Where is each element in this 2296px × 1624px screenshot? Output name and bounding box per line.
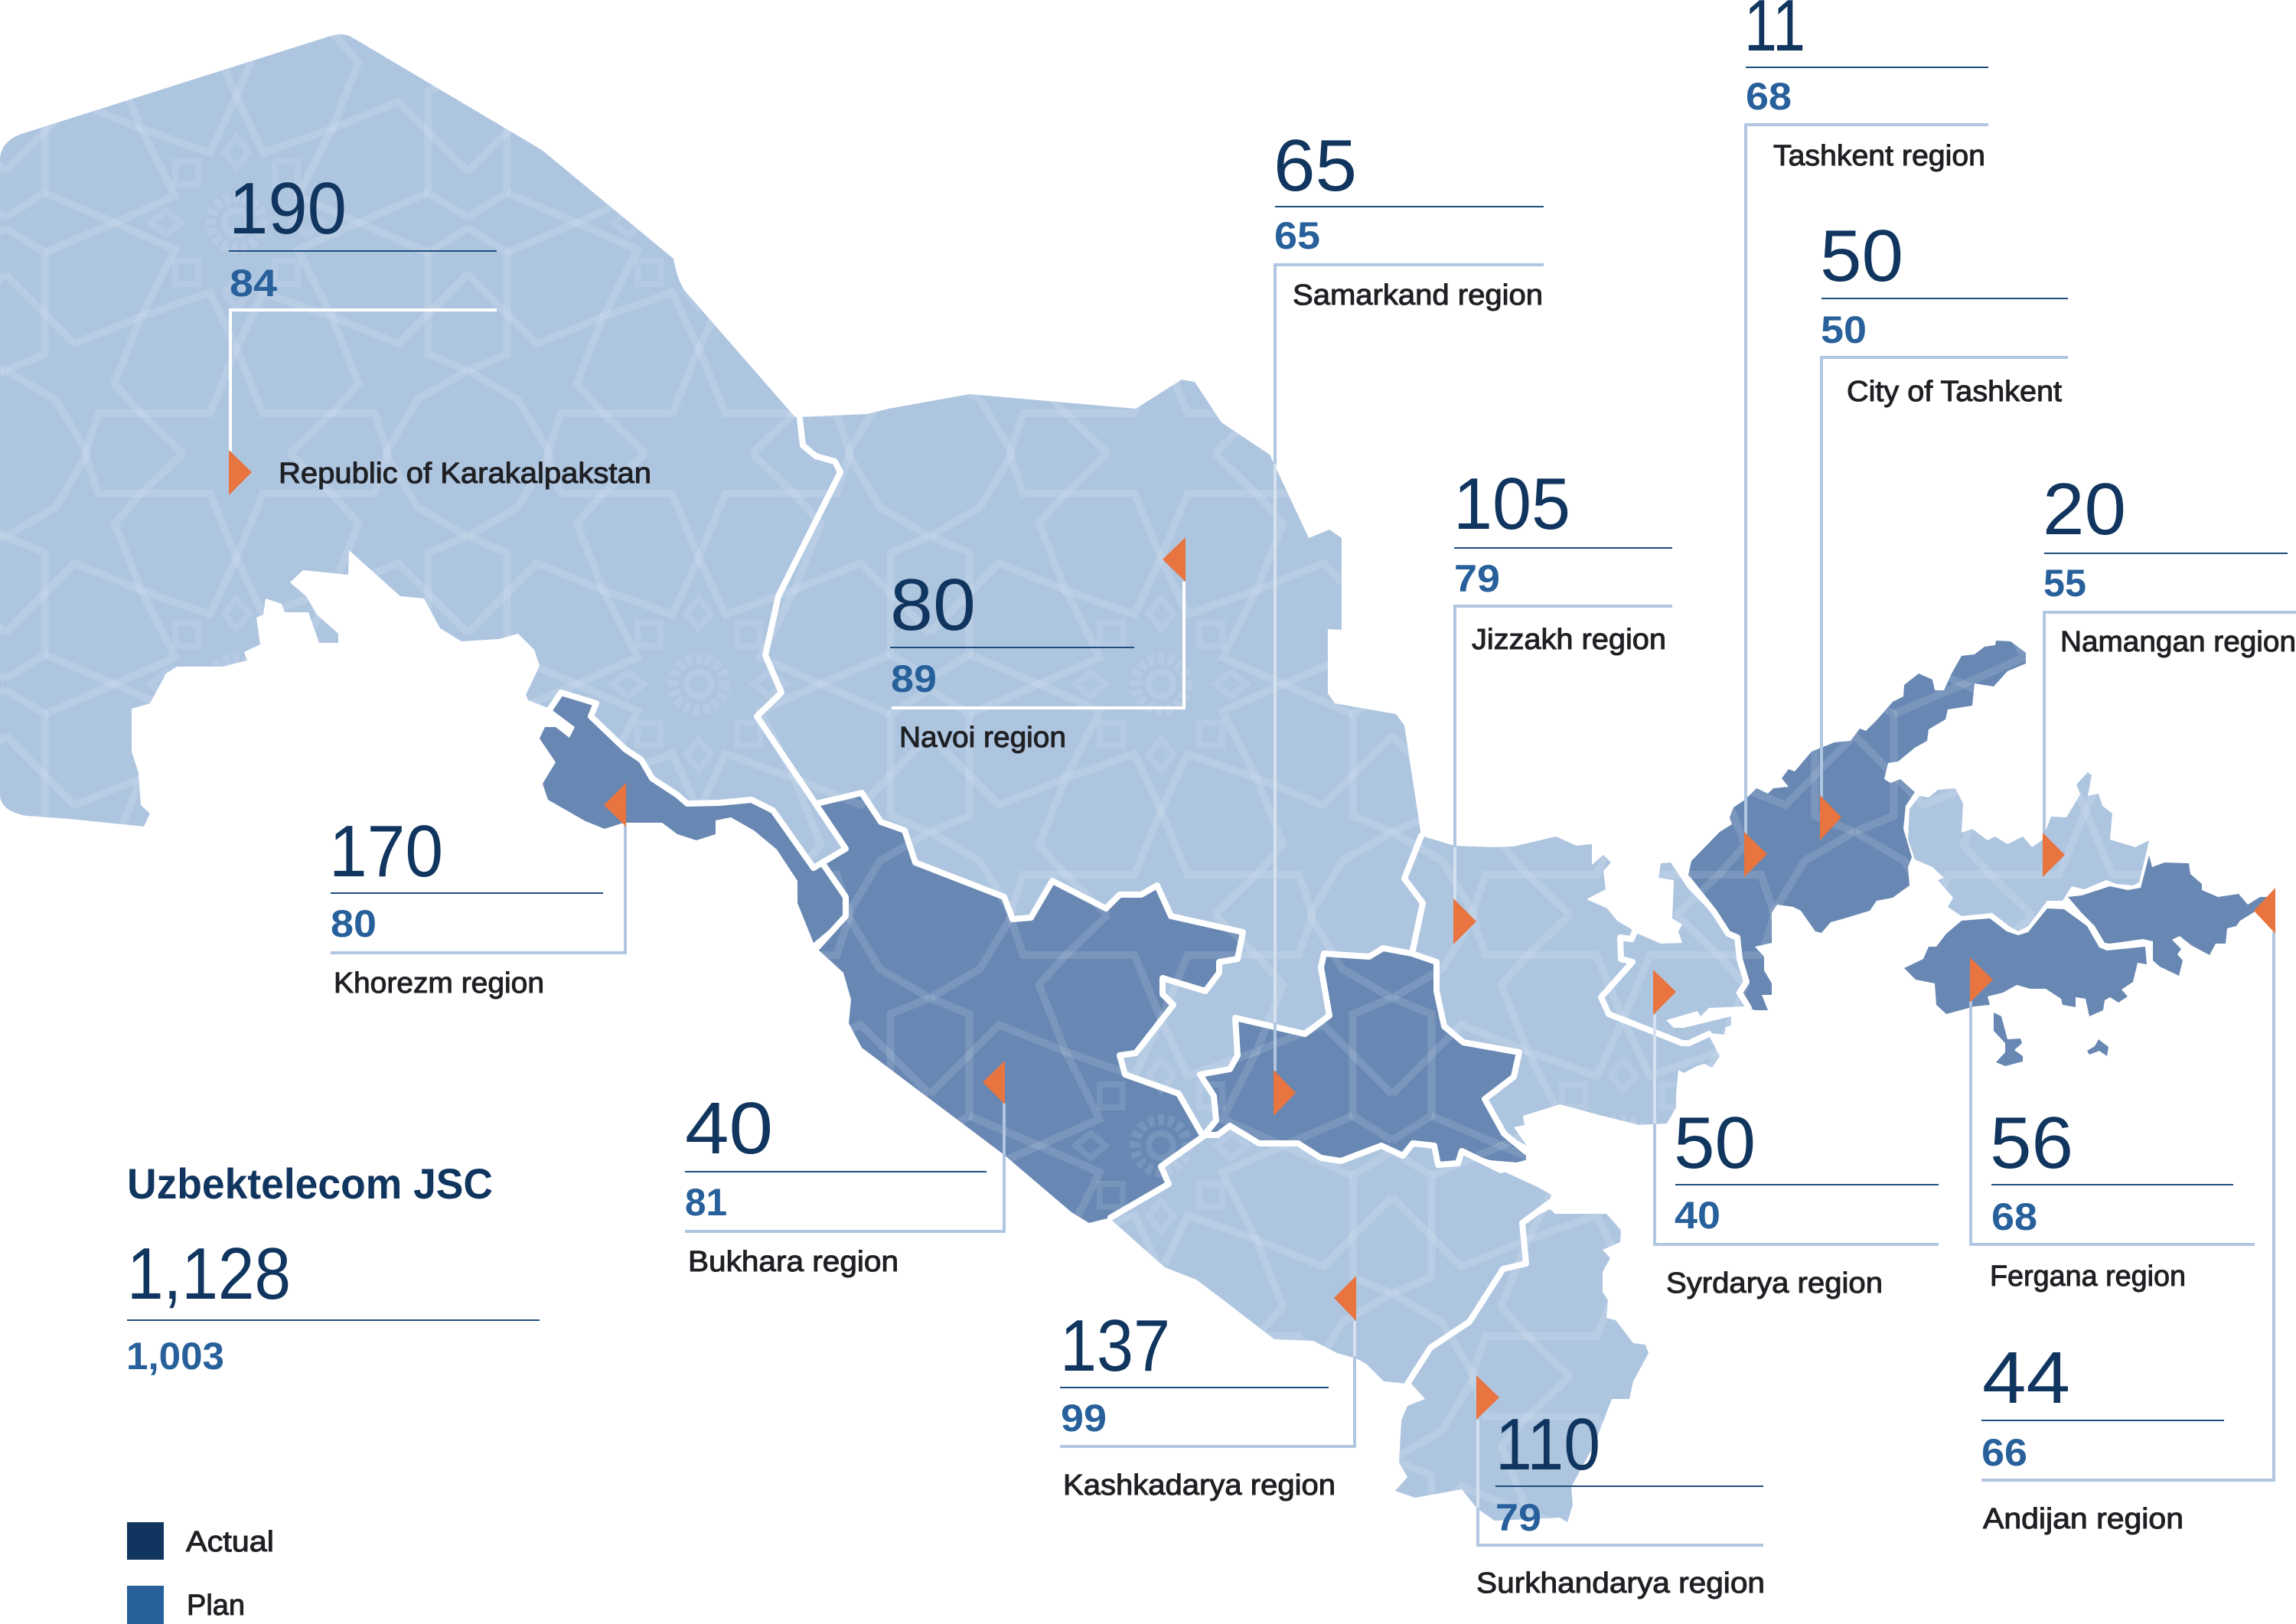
callout: Surkhandarya region: 110 <box>1495 1404 1600 1485</box>
region: Jizzakh <box>1404 836 1720 1146</box>
callout: Kashkadarya region: 137 <box>1060 1305 1170 1387</box>
callout: Jizzakh region: 79 <box>1454 557 1500 600</box>
callout: Khorezm region: 170 <box>329 810 443 892</box>
legend swatch: actual <box>127 1522 164 1560</box>
region: Tashkent <box>1688 641 2026 1010</box>
callout: Andijan region: 66 <box>1981 1431 2027 1474</box>
callout: Surkhandarya region: Surkhandarya region <box>1476 1567 1765 1600</box>
region: Bukhara <box>817 793 1243 1223</box>
region: Surkhandarya <box>1395 1209 1649 1522</box>
region: Andijan <box>2068 856 2268 976</box>
region: Syrdarya <box>1601 863 1745 1042</box>
callout: Samarkand region: 65 <box>1274 125 1357 207</box>
callout: Tashkent region: Tashkent region <box>1773 140 1985 172</box>
region: Khorezm <box>540 693 846 943</box>
callout: Khorezm region: Khorezm region <box>334 967 544 1000</box>
callout: Kashkadarya region: 99 <box>1061 1397 1107 1440</box>
callout: Bukhara region: 81 <box>685 1181 727 1224</box>
callout: Fergana region: 56 <box>1990 1102 2073 1184</box>
region: Samarkand <box>1200 948 1526 1165</box>
callout: Republic of Karakalpakstan: 84 <box>230 262 277 305</box>
total plan: 1,003 <box>126 1335 224 1378</box>
callout: Navoi region: Navoi region <box>899 722 1066 754</box>
region: Karakalpakstan <box>0 34 846 868</box>
title: Uzbektelecom JSC <box>127 1159 493 1208</box>
callout: Namangan region: Namangan region <box>2060 626 2296 658</box>
callout: City of Tashkent <box>1820 215 2068 840</box>
callout: Jizzakh region: Jizzakh region <box>1472 624 1666 656</box>
callout: Republic of Karakalpakstan <box>229 168 651 495</box>
legend <box>127 1522 274 1624</box>
callout: Fergana region: Fergana region <box>1990 1260 2186 1293</box>
callout: City of Tashkent: City of Tashkent <box>1847 376 2062 408</box>
region: Fergana <box>1904 908 2147 1066</box>
callout: Kashkadarya region <box>1060 1276 1356 1502</box>
legend swatch: plan <box>127 1586 164 1624</box>
callout: Khorezm region: 80 <box>331 902 377 945</box>
callout: Jizzakh region <box>1453 463 1672 944</box>
callout: Andijan region <box>1981 888 2275 1535</box>
region: Namangan <box>1908 772 2149 931</box>
callout: Fergana region: 68 <box>1991 1195 2037 1238</box>
total: Uzbektelecom JSC <box>126 1159 540 1378</box>
callout: Khorezm region <box>329 783 626 1000</box>
callout: Andijan region: Andijan region <box>1983 1503 2183 1535</box>
callout: Syrdarya region: 40 <box>1675 1194 1720 1237</box>
callout: City of Tashkent: 50 <box>1820 215 1903 297</box>
callout: Bukhara region: 40 <box>685 1088 773 1169</box>
region: Navoi <box>757 380 1423 1136</box>
callout: Andijan region: 44 <box>1982 1337 2070 1419</box>
callout: Bukhara region: Bukhara region <box>688 1246 899 1278</box>
legend label: actual: Actual <box>186 1526 274 1558</box>
callout: Namangan region: 55 <box>2043 562 2086 605</box>
total actual: 1,128 <box>127 1233 291 1315</box>
callout: Fergana region <box>1970 957 2255 1293</box>
callout: Republic of Karakalpakstan: Republic of Karakalpakstan <box>279 458 651 490</box>
callout: Bukhara region <box>685 1061 1005 1278</box>
callout: Syrdarya region <box>1653 970 1939 1300</box>
callout: Navoi region <box>890 537 1186 754</box>
callout: Samarkand region: Samarkand region <box>1293 279 1543 311</box>
callout: Kashkadarya region: Kashkadarya region <box>1063 1469 1336 1502</box>
callout: Syrdarya region: 50 <box>1674 1102 1756 1184</box>
callout: Namangan region: 20 <box>2043 468 2126 550</box>
region: Kashkadarya <box>1110 1126 1551 1384</box>
callout: Navoi region: 89 <box>891 657 937 700</box>
callout: Surkhandarya region <box>1476 1375 1765 1600</box>
callout: Tashkent region <box>1744 0 1988 877</box>
callout: Republic of Karakalpakstan: 190 <box>229 168 347 249</box>
callout: Jizzakh region: 105 <box>1453 463 1570 545</box>
callout: Tashkent region: 68 <box>1746 75 1792 118</box>
legend label: plan: Plan <box>187 1590 245 1622</box>
callout: Navoi region: 80 <box>890 564 976 646</box>
region boundaries <box>550 419 1749 1384</box>
callout: Samarkand region <box>1274 125 1544 1116</box>
callout: Surkhandarya region: 79 <box>1495 1496 1541 1539</box>
callout: City of Tashkent: 50 <box>1821 308 1867 351</box>
callout: Namangan region <box>2043 468 2296 877</box>
callout: Samarkand region: 65 <box>1274 214 1320 257</box>
callout: Syrdarya region: Syrdarya region <box>1666 1267 1883 1300</box>
